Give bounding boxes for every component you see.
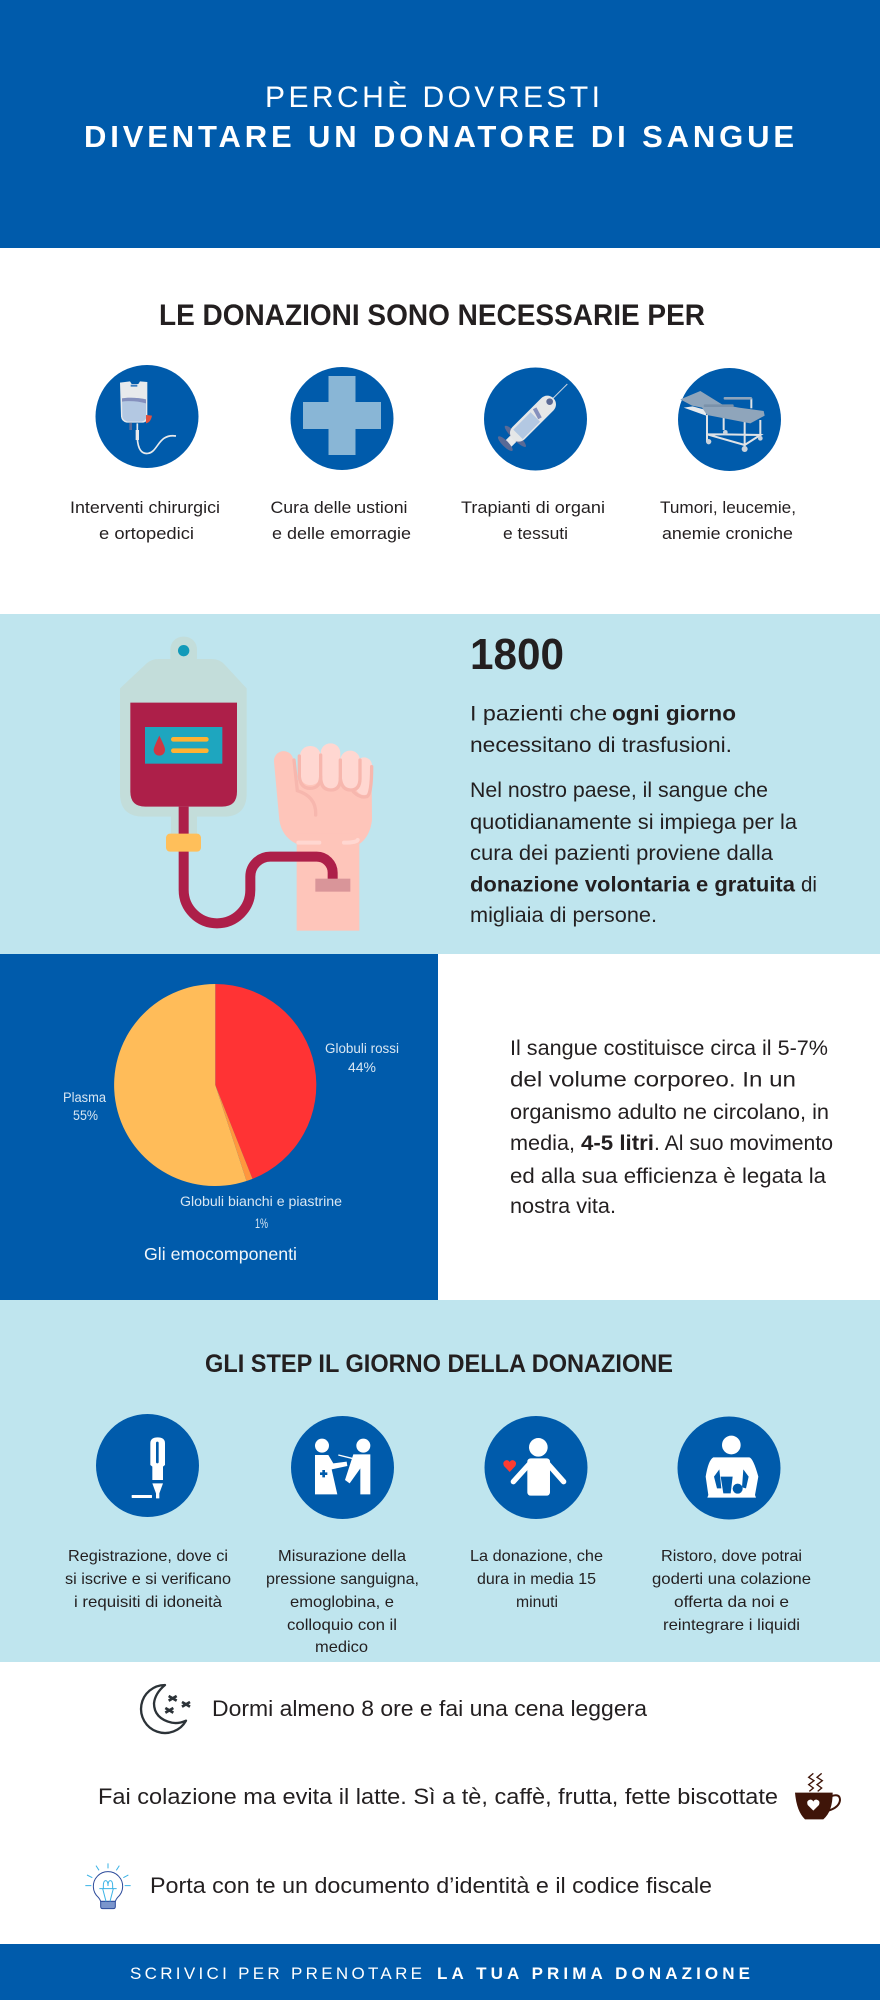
caption 3: Trapianti di organi xyxy=(461,498,605,517)
caption 2: Cura delle ustioni xyxy=(270,498,408,517)
icon: moon xyxy=(141,1685,190,1733)
icon: IV bag xyxy=(96,365,198,468)
pie chart xyxy=(114,984,316,1186)
title line 1: PERCHÈ DOVRESTI xyxy=(265,81,600,114)
text: blood volume: organismo adulto ne circolano, in xyxy=(510,1101,829,1124)
title line 2: DIVENTARE UN DONATORE DI SANGUE xyxy=(84,119,794,154)
text: step 2: Misurazione della xyxy=(278,1548,406,1565)
text: blood volume: 4-5 litri xyxy=(581,1132,654,1155)
text: step 4: offerta da noi e xyxy=(674,1594,789,1611)
text: voluntary donation: quotidianamente si impiega per la xyxy=(470,811,797,834)
caption 4: anemie croniche xyxy=(662,524,793,543)
text: voluntary donation xyxy=(470,779,817,927)
text: step 1: si iscrive e si verificano xyxy=(65,1571,231,1588)
text: patients per day: ogni giorno xyxy=(612,702,736,726)
text: step 1: i requisiti di idoneità xyxy=(74,1594,222,1611)
text: step 2: pressione sanguigna, xyxy=(266,1571,419,1588)
icon: donor with heart xyxy=(484,1416,588,1519)
icon: refreshment xyxy=(678,1416,780,1520)
text: step 2: medico xyxy=(315,1639,368,1656)
text: step 4: goderti una colazione xyxy=(652,1571,811,1588)
text: step 4: Ristoro, dove potrai xyxy=(661,1548,802,1565)
text: step 3 xyxy=(470,1548,603,1611)
panel: header xyxy=(0,0,880,248)
label: globuli rossi: 44% xyxy=(348,1060,376,1075)
text: step 4: reintegrare i liquidi xyxy=(663,1617,800,1634)
icon: medical cross xyxy=(290,367,394,470)
icon: blood pressure check xyxy=(291,1416,394,1519)
chart caption: Gli emocomponenti xyxy=(144,1244,297,1264)
text: blood volume: Il sangue costituisce circa il 5-7% xyxy=(510,1037,828,1060)
label: plasma: Plasma xyxy=(63,1090,106,1105)
label: globuli rossi: Globuli rossi xyxy=(325,1041,399,1056)
footer text: SCRIVICI PER PRENOTARE xyxy=(130,1964,422,1983)
text: voluntary donation: di xyxy=(801,874,817,896)
panel: blood components chart xyxy=(0,954,438,1300)
caption 3 xyxy=(461,498,605,543)
text: sleep tip: Dormi almeno 8 ore e fai una cena leggera xyxy=(212,1696,648,1721)
text: step 3: La donazione, che xyxy=(470,1548,603,1565)
number: 1800: 1800 xyxy=(470,630,564,679)
text: blood volume: media, xyxy=(510,1132,575,1155)
caption 2: e delle emorragie xyxy=(272,524,411,543)
panel: donation day steps xyxy=(0,1300,880,1662)
footer text: LA TUA PRIMA DONAZIONE xyxy=(437,1964,750,1983)
text: patients per day xyxy=(470,702,736,757)
text: step 1 xyxy=(65,1548,231,1611)
text: blood volume: ed alla sua efficienza è legata la xyxy=(510,1165,826,1188)
text: step 2: emoglobina, e xyxy=(290,1594,394,1611)
icon: light bulb xyxy=(85,1863,131,1909)
label: globuli bianchi: 1% xyxy=(255,1216,268,1231)
text: voluntary donation: migliaia di persone. xyxy=(470,904,657,927)
text: step 2: colloquio con il xyxy=(287,1617,397,1634)
illustration: blood bag and arm xyxy=(120,637,372,931)
caption 4 xyxy=(660,498,796,543)
text: step 3: dura in media 15 xyxy=(477,1571,596,1588)
text: step 4 xyxy=(652,1548,811,1634)
text: needs captions xyxy=(70,498,796,543)
text: voluntary donation: Nel nostro paese, il sangue che xyxy=(470,779,768,802)
heading: steps: GLI STEP IL GIORNO DELLA DONAZIONE xyxy=(205,1350,673,1378)
text: blood volume: nostra vita. xyxy=(510,1195,616,1218)
panel: footer xyxy=(0,1944,880,2000)
icon: syringe xyxy=(484,368,587,470)
caption 3: e tessuti xyxy=(503,524,568,543)
label: plasma xyxy=(63,1090,106,1123)
label: globuli bianchi xyxy=(180,1194,342,1231)
caption 1: Interventi chirurgici xyxy=(70,498,220,517)
icon: pen xyxy=(96,1414,199,1517)
label: globuli rossi xyxy=(325,1041,399,1075)
text: patients per day: necessitano di trasfusioni. xyxy=(470,734,732,757)
text: voluntary donation: cura dei pazienti proviene dalla xyxy=(470,842,773,865)
text: step 1: Registrazione, dove ci xyxy=(68,1548,228,1565)
caption 1 xyxy=(70,498,220,543)
text: blood volume: del volume corporeo. In un xyxy=(510,1068,796,1092)
text: step 2 xyxy=(266,1548,419,1656)
footer text xyxy=(130,1964,750,1983)
text: breakfast tip: Fai colazione ma evita il latte. Sì a tè, caffè, frutta, fette biscottate xyxy=(98,1784,778,1809)
text: documents tip: Porta con te un documento d’identità e il codice fiscale xyxy=(150,1873,712,1898)
text: step 3: minuti xyxy=(516,1594,558,1611)
panel: 1800 patients xyxy=(0,614,880,954)
caption 2 xyxy=(270,498,411,543)
text: patients per day: I pazienti che xyxy=(470,702,607,726)
icon: stretcher xyxy=(678,368,781,471)
caption 4: Tumori, leucemie, xyxy=(660,498,796,517)
label: plasma: 55% xyxy=(73,1108,98,1123)
text: blood volume: . Al suo movimento xyxy=(654,1132,833,1155)
label: globuli bianchi: Globuli bianchi e piastrine xyxy=(180,1194,342,1209)
text: blood volume xyxy=(510,1037,833,1218)
panel: needs icons row xyxy=(96,365,781,471)
caption 1: e ortopedici xyxy=(99,524,194,543)
heading: donations needed: LE DONAZIONI SONO NECESSARIE PER xyxy=(159,299,705,332)
icon: coffee cup xyxy=(795,1773,840,1819)
text: voluntary donation: donazione volontaria e gratuita xyxy=(470,874,795,896)
